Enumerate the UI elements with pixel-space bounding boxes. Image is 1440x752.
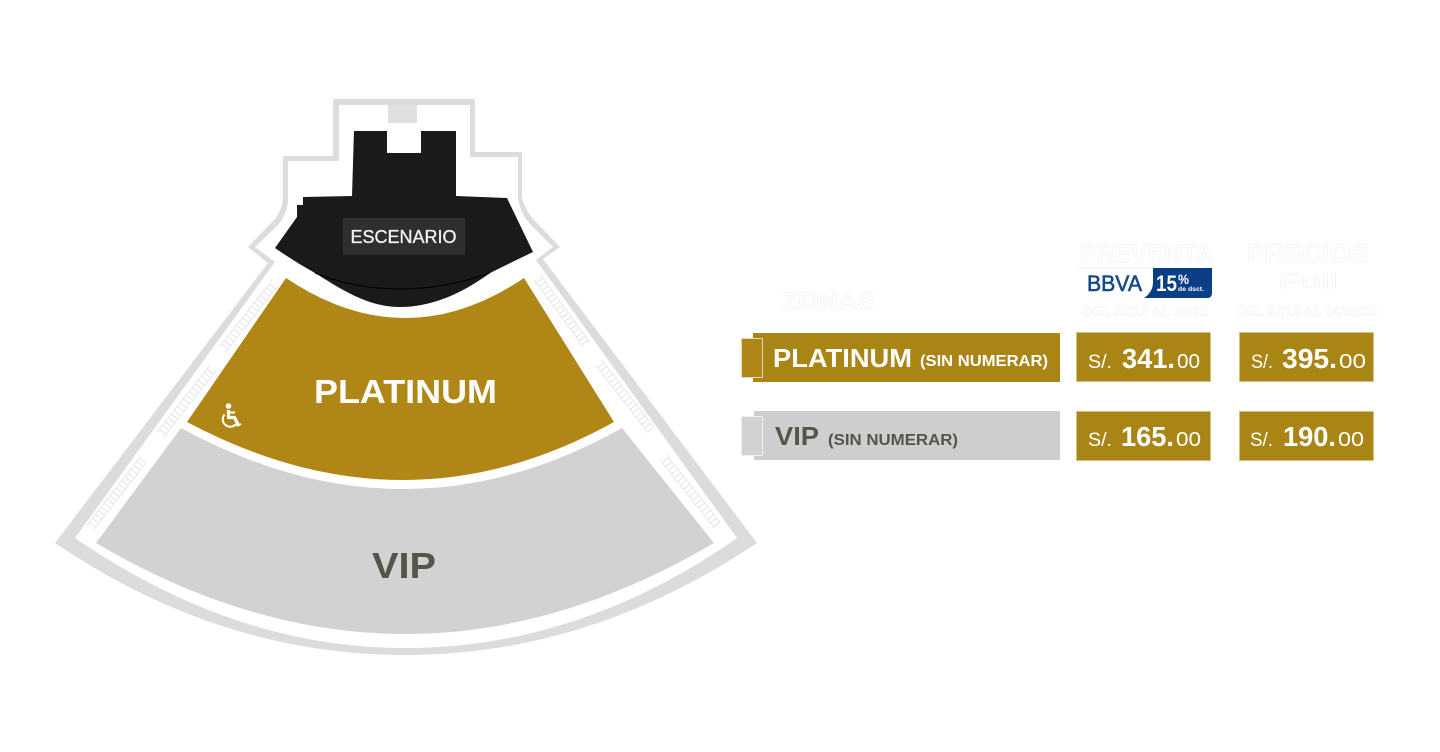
price: vip presale bbox=[1076, 412, 1210, 460]
price: platinum presale: S/. bbox=[1088, 352, 1112, 373]
price: platinum regular: 395. bbox=[1282, 343, 1337, 374]
bbva discount badge: % bbox=[1178, 271, 1189, 287]
column heading: presale bbox=[1076, 240, 1213, 319]
bbva discount badge: de dsct. bbox=[1178, 286, 1204, 293]
zone: platinum bbox=[187, 278, 614, 480]
icon: wheelchair bbox=[223, 403, 241, 427]
vip swatch bbox=[742, 416, 762, 456]
top service block bbox=[388, 105, 417, 123]
column heading: regular prices bbox=[1237, 240, 1377, 319]
presale title: PREVENTA bbox=[1080, 240, 1213, 268]
vip label: VIP bbox=[372, 545, 436, 586]
column heading: zones: ZONAS bbox=[782, 288, 875, 315]
vip name: VIP bbox=[775, 421, 819, 451]
platinum name: PLATINUM bbox=[773, 343, 912, 373]
price: platinum presale: 341. bbox=[1122, 343, 1175, 374]
vip area bbox=[96, 428, 714, 634]
zone: vip bbox=[96, 428, 714, 634]
discount: 15 bbox=[1156, 271, 1177, 296]
bbva discount badge bbox=[1076, 268, 1212, 298]
price: vip regular: 190. bbox=[1283, 421, 1336, 452]
platinum area bbox=[187, 278, 614, 480]
price table bbox=[742, 240, 1377, 460]
price: platinum regular: S/. bbox=[1251, 352, 1273, 373]
regular title: PRECIOS bbox=[1247, 240, 1368, 268]
price: vip presale: 165. bbox=[1121, 421, 1174, 452]
side seating rows bbox=[90, 277, 717, 528]
vip bar bbox=[754, 411, 1060, 460]
row: platinum bbox=[742, 332, 1374, 382]
venue seating map bbox=[55, 99, 757, 655]
stage label: ESCENARIO bbox=[350, 227, 456, 247]
price: vip regular bbox=[1240, 412, 1374, 460]
regular subtitle: Full bbox=[1278, 271, 1338, 293]
price: vip regular: S/. bbox=[1250, 430, 1273, 451]
platinum label: PLATINUM bbox=[314, 373, 497, 410]
price: vip presale: 00 bbox=[1176, 429, 1201, 451]
price: vip regular: 00 bbox=[1338, 429, 1364, 451]
platinum note: (SIN NUMERAR) bbox=[920, 353, 1048, 370]
price: vip presale: S/. bbox=[1088, 430, 1112, 451]
platinum swatch bbox=[742, 338, 762, 378]
platinum bar bbox=[753, 333, 1060, 382]
regular dates: DEL 27/12 AL 04/01/22 bbox=[1237, 303, 1377, 319]
row: vip bbox=[742, 411, 1374, 460]
stage label box bbox=[343, 218, 465, 255]
venue interior floor bbox=[75, 105, 737, 648]
stage bbox=[275, 131, 533, 307]
price: platinum presale bbox=[1076, 332, 1210, 382]
price: platinum presale: 00 bbox=[1177, 351, 1200, 373]
price: platinum regular: 00 bbox=[1339, 351, 1366, 373]
stage shape bbox=[275, 131, 533, 307]
price: platinum regular bbox=[1240, 332, 1374, 382]
venue outer wall bbox=[55, 99, 757, 655]
bbva name: BBVA bbox=[1087, 271, 1142, 296]
vip note: (SIN NUMERAR) bbox=[828, 432, 958, 449]
presale dates: DEL 22/12 AL 26/12 bbox=[1083, 303, 1208, 319]
